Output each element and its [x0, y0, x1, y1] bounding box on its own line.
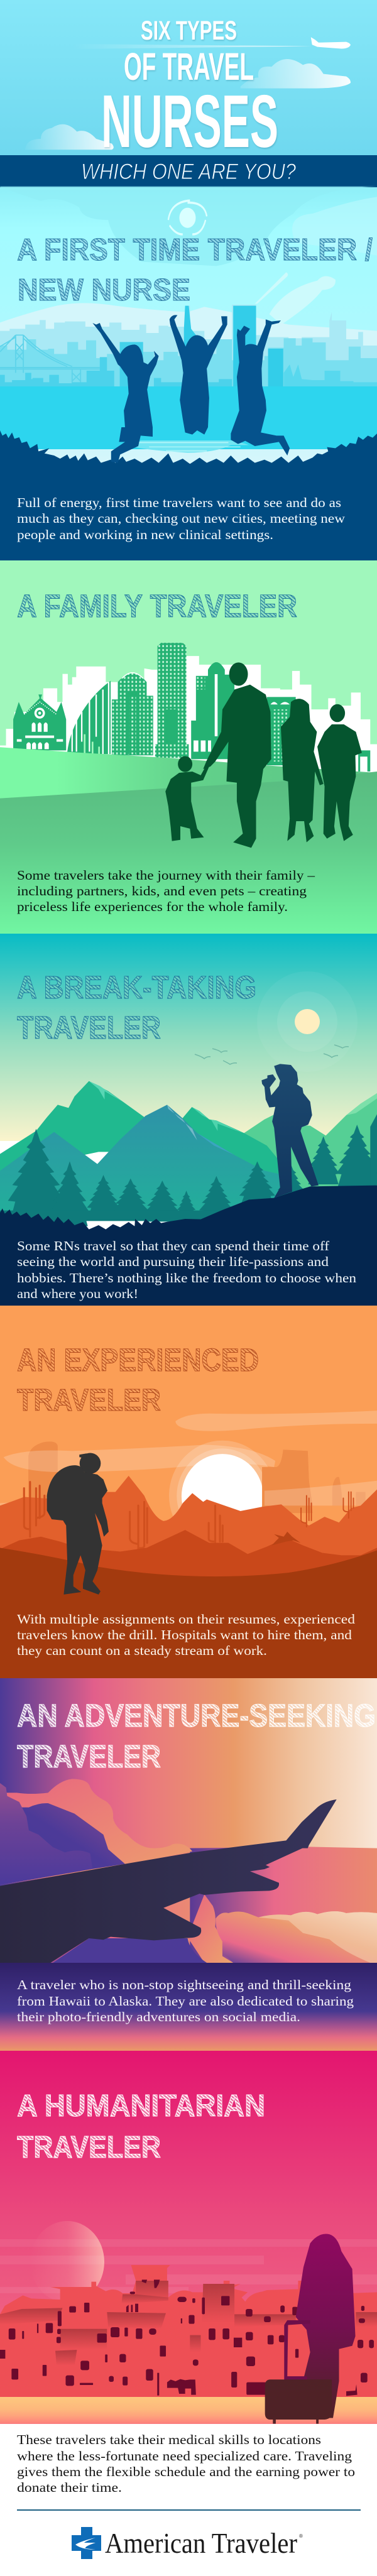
body text: priceless life experiences for the whole family. — [17, 899, 288, 914]
dome tower — [191, 662, 234, 759]
hill — [0, 747, 377, 801]
body text: they can count on a steady stream of work. — [17, 1643, 267, 1658]
body panel — [0, 1963, 377, 2051]
bridge — [0, 335, 100, 385]
panel: header — [0, 0, 377, 188]
person: left jumper — [92, 323, 159, 463]
subtitle band — [0, 155, 377, 188]
illustration: desert and backpacker — [0, 1411, 377, 1678]
curved tower — [67, 681, 111, 754]
person: traveler with suitcase — [265, 2234, 356, 2424]
body panel: and where you work! — [17, 1286, 138, 1301]
body text: With multiple assignments on their resumes, experienced — [17, 1612, 356, 1627]
body text: travelers know the drill. Hospitals want to hire them, and — [17, 1627, 352, 1642]
heading: humanitarian — [17, 2089, 265, 2164]
panel: humanitarian traveler — [0, 2051, 377, 2424]
trees — [0, 1114, 377, 1226]
body panel: their photo-friendly adventures on social media. — [17, 2009, 300, 2024]
heading: A BREAK-TAKING — [17, 969, 256, 1005]
icon: moon — [30, 2221, 104, 2303]
domed building — [112, 673, 153, 755]
ground — [0, 772, 377, 934]
cloud bands — [0, 1411, 377, 1520]
icon: birds — [195, 1045, 349, 1064]
city silhouette — [0, 2265, 312, 2398]
white skyline — [0, 652, 377, 774]
mid skyline — [0, 329, 377, 388]
heading: humanitarian: TRAVELER — [17, 2131, 161, 2164]
left purple cloud — [0, 1783, 92, 1885]
body text — [17, 868, 315, 914]
upper pink cloud — [0, 1779, 192, 1885]
panel: family traveler — [0, 560, 377, 934]
body panel: much as they can, checking out new cities, meeting new — [17, 511, 346, 526]
person: adult — [203, 662, 271, 848]
heading: humanitarian: A HUMANITARIAN — [17, 2089, 265, 2123]
body panel: A traveler who is non-stop sightseeing and thrill-seeking — [17, 1977, 352, 1992]
body text — [17, 2432, 355, 2495]
front skyline — [0, 357, 114, 388]
mid hills — [0, 1530, 377, 1585]
illustration: mountains and photographer — [0, 1064, 377, 1252]
heading: A FAMILY TRAVELER — [17, 588, 297, 624]
body text: donate their time. — [17, 2480, 122, 2495]
heading — [17, 1698, 376, 1774]
subtitle band: WHICH ONE ARE YOU? — [81, 160, 296, 184]
body panel: hobbies. There’s nothing like the freedom to choose when — [17, 1270, 357, 1285]
body text: gives them the flexible schedule and the earning power to — [17, 2464, 355, 2479]
illustration: city skyline and jumping nurses — [0, 187, 377, 478]
heading: TRAVELER — [17, 1738, 161, 1774]
panel: experienced traveler — [0, 1306, 377, 1678]
pond — [131, 440, 249, 453]
sun — [169, 1441, 276, 1551]
icon: sun — [168, 200, 207, 234]
person: center jumper — [170, 315, 227, 435]
heading — [17, 233, 373, 307]
tall tower — [155, 643, 188, 758]
heading — [17, 969, 256, 1045]
panel: white footer — [0, 2424, 377, 2576]
mesas — [28, 1441, 58, 1505]
heading: TRAVELER — [17, 1010, 161, 1045]
body panel: Full of energy, first time travelers want to see and do as — [17, 495, 341, 510]
right building — [267, 697, 370, 772]
mid purple cloud — [0, 1803, 125, 1885]
water strip — [0, 2397, 377, 2424]
person: toddler — [165, 756, 209, 841]
panel: adventure-seeking traveler — [0, 1678, 377, 2051]
body text: including partners, kids, and even pets – creating — [17, 883, 307, 898]
icon: airplane — [311, 37, 351, 48]
ground — [0, 1548, 377, 1678]
body panel: seeing the world and pursuing their life-passions and — [17, 1254, 329, 1269]
body text: These travelers take their medical skills to locations — [17, 2432, 321, 2447]
panel: first time traveler — [0, 187, 377, 560]
shaded walls — [0, 2281, 377, 2366]
wing — [0, 1799, 337, 1963]
title: OF TRAVEL — [124, 45, 254, 88]
title: SIX TYPES — [141, 16, 237, 46]
illustration: clouds and airplane wing — [0, 1779, 377, 1965]
body panel — [0, 1231, 377, 1306]
person: boy — [317, 704, 362, 841]
cactus — [24, 1482, 353, 1551]
person: right jumper — [231, 319, 290, 456]
body panel: Some RNs travel so that they can spend their time off — [17, 1238, 329, 1253]
body text: Some travelers take the journey with their family – — [17, 868, 315, 883]
body text: where the less-fortunate need specialized care. Traveling — [17, 2448, 352, 2464]
ground — [0, 386, 377, 449]
far hills — [0, 1476, 377, 1580]
grass — [0, 430, 377, 478]
icon: clouds and airplane — [25, 37, 351, 150]
icon: logo cross — [72, 2527, 101, 2559]
person: photographer — [261, 1064, 319, 1198]
logo: American Traveler — [105, 2528, 297, 2559]
windows — [0, 2279, 374, 2396]
illustration: city and traveler — [0, 2265, 377, 2424]
illustration: city and family — [0, 643, 377, 934]
ground with grass — [0, 1186, 377, 1252]
heading: TRAVELER — [17, 1384, 161, 1417]
title — [101, 16, 278, 163]
horizon — [190, 1847, 377, 1965]
icon: sun — [257, 971, 358, 1072]
body panel — [0, 464, 377, 560]
body text — [17, 1612, 356, 1658]
heading — [17, 1342, 259, 1417]
heading: NEW NURSE — [18, 273, 190, 307]
person: girl — [281, 699, 324, 843]
panel: break-taking traveler — [0, 934, 377, 1306]
body panel: from Hawaii to Alaska. They are also dedicated to sharing — [17, 1994, 354, 2009]
church — [13, 694, 66, 750]
heading: AN EXPERIENCED — [17, 1342, 259, 1378]
person: backpacker — [47, 1453, 109, 1595]
far skyline — [0, 305, 377, 388]
logo: ® — [299, 2533, 303, 2539]
lower clouds — [187, 1894, 233, 1963]
distant haze — [0, 303, 377, 385]
sky streaks — [0, 2239, 377, 2293]
body panel: people and working in new clinical settings. — [17, 527, 273, 542]
